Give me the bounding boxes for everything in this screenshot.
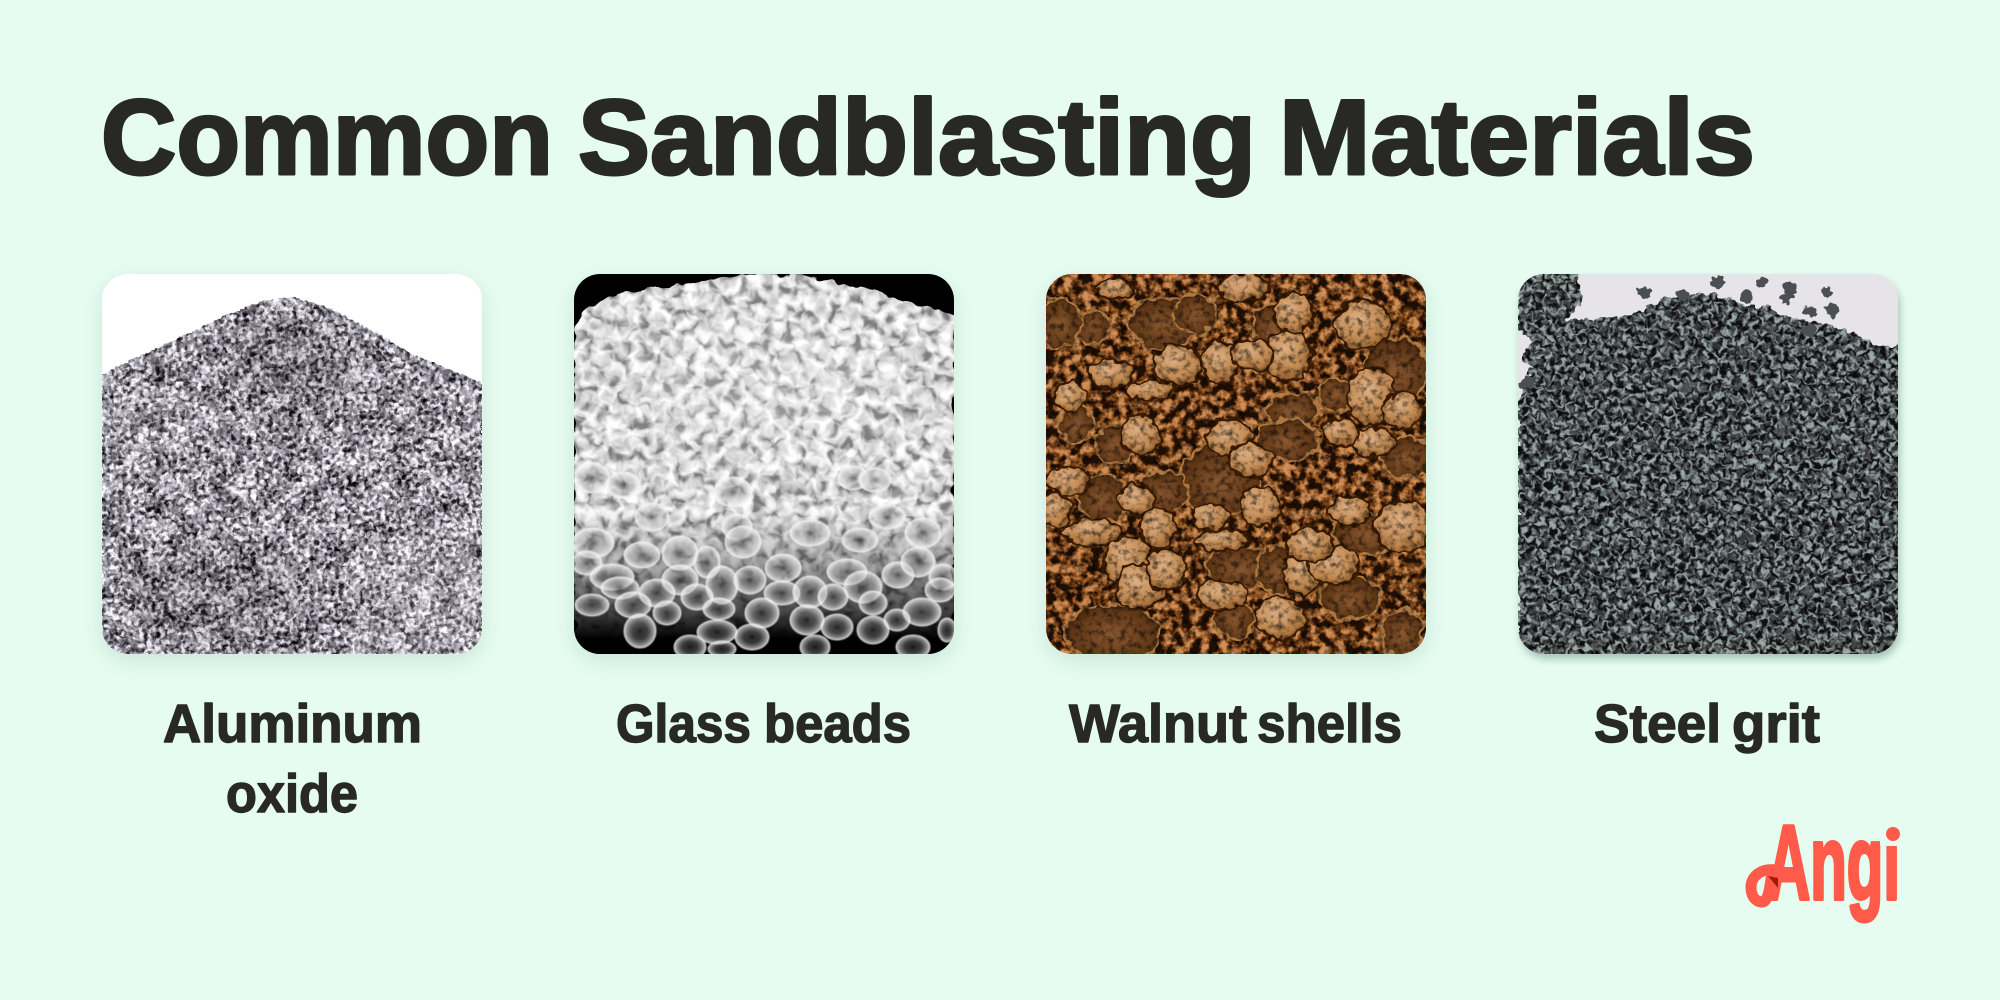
label: steel grit: Steel [1594, 694, 1721, 754]
photo: glass beads [574, 274, 954, 654]
label: aluminum oxide: Aluminum [163, 694, 422, 754]
label: steel grit: grit [1732, 694, 1820, 754]
photo: walnut shells [1046, 274, 1426, 654]
label: walnut shells [1069, 694, 1402, 754]
label: steel grit [1594, 694, 1820, 754]
label: glass beads [616, 694, 911, 754]
title: Common [101, 77, 553, 197]
logo: Angi: Angi [1767, 804, 1900, 922]
title: Sandblasting [578, 77, 1256, 197]
photo: steel grit [1518, 274, 1898, 654]
label: aluminum oxide: oxide [226, 764, 358, 824]
logo: Angi [1751, 804, 1904, 922]
label: glass beads: Glass [616, 694, 751, 754]
title [101, 77, 1755, 197]
label: walnut shells: shells [1257, 694, 1402, 754]
label: aluminum oxide [163, 694, 422, 824]
label: walnut shells: Walnut [1069, 694, 1247, 754]
title: Materials [1279, 77, 1755, 197]
photo: aluminum oxide powder pile [102, 274, 482, 654]
label: glass beads: beads [764, 694, 911, 754]
